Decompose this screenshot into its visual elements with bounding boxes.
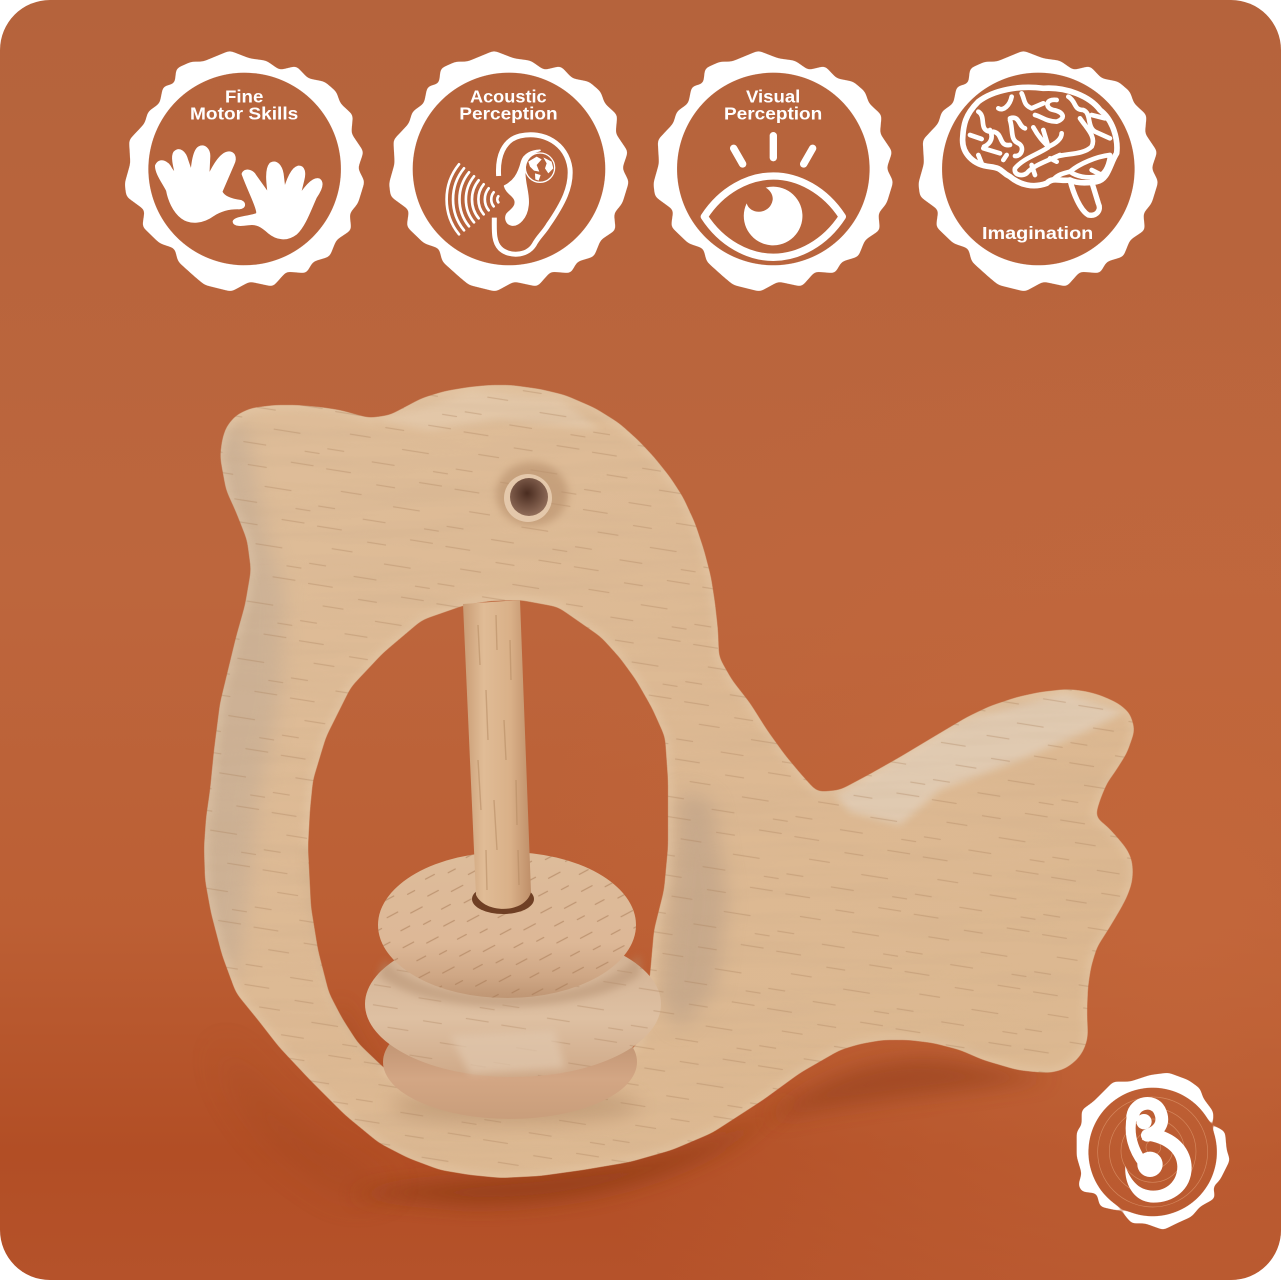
wooden dolphin body: [190, 370, 1150, 1190]
shade from top ring: [378, 955, 640, 1007]
heading: [190, 86, 298, 123]
stacked wooden rings: [365, 852, 661, 1119]
grey side shading left neck: [204, 426, 284, 966]
middle ring end grain patch: [450, 1030, 565, 1074]
wood ring lines: [1098, 1097, 1208, 1207]
bottom ring: [383, 1005, 637, 1119]
shadow of rings on wood: [390, 1088, 640, 1124]
lower inner edge shade: [308, 847, 383, 1067]
badge ring: [653, 51, 893, 292]
eye hole: [496, 462, 568, 526]
sound waves: [447, 164, 498, 234]
heading: Acoustic: [470, 86, 547, 106]
icon: hands: [157, 148, 320, 237]
dark shading right of hole: [660, 790, 728, 1030]
heading: Fine: [225, 86, 264, 106]
heading: [724, 86, 822, 123]
heading: [459, 86, 558, 123]
logo mark: [1125, 1103, 1192, 1203]
logo scalloped ring: [1077, 1073, 1230, 1230]
grain texture: [190, 370, 1150, 1190]
badge ring: [918, 51, 1158, 292]
badge: acoustic perception: [389, 51, 629, 292]
head top pale band: [392, 391, 592, 430]
top ring: [378, 852, 636, 998]
ring center hole: [472, 884, 534, 914]
middle ring: [365, 931, 661, 1077]
heading: Perception: [724, 103, 822, 123]
heading: Imagination: [982, 223, 1093, 243]
badge: visual perception: [653, 51, 893, 292]
badge: imagination: [918, 51, 1158, 292]
heading: Motor Skills: [190, 103, 298, 123]
icon: ear with sound waves: [447, 135, 570, 254]
heading: Visual: [746, 86, 800, 106]
logo badge: [1077, 1073, 1230, 1230]
icon: brain: [963, 87, 1117, 215]
badge ring: [389, 51, 629, 292]
middle ring grain: [365, 931, 661, 1077]
heading: Perception: [459, 103, 558, 123]
wooden rod: [463, 600, 531, 909]
globe: [525, 153, 555, 182]
badge: fine motor skills: [125, 51, 365, 292]
shadow under toy: [220, 1000, 1050, 1205]
tail top pale band: [835, 692, 1125, 825]
edge bevel highlight: [288, 656, 1134, 1178]
icon: eye: [704, 136, 842, 257]
badge ring: [125, 51, 365, 292]
